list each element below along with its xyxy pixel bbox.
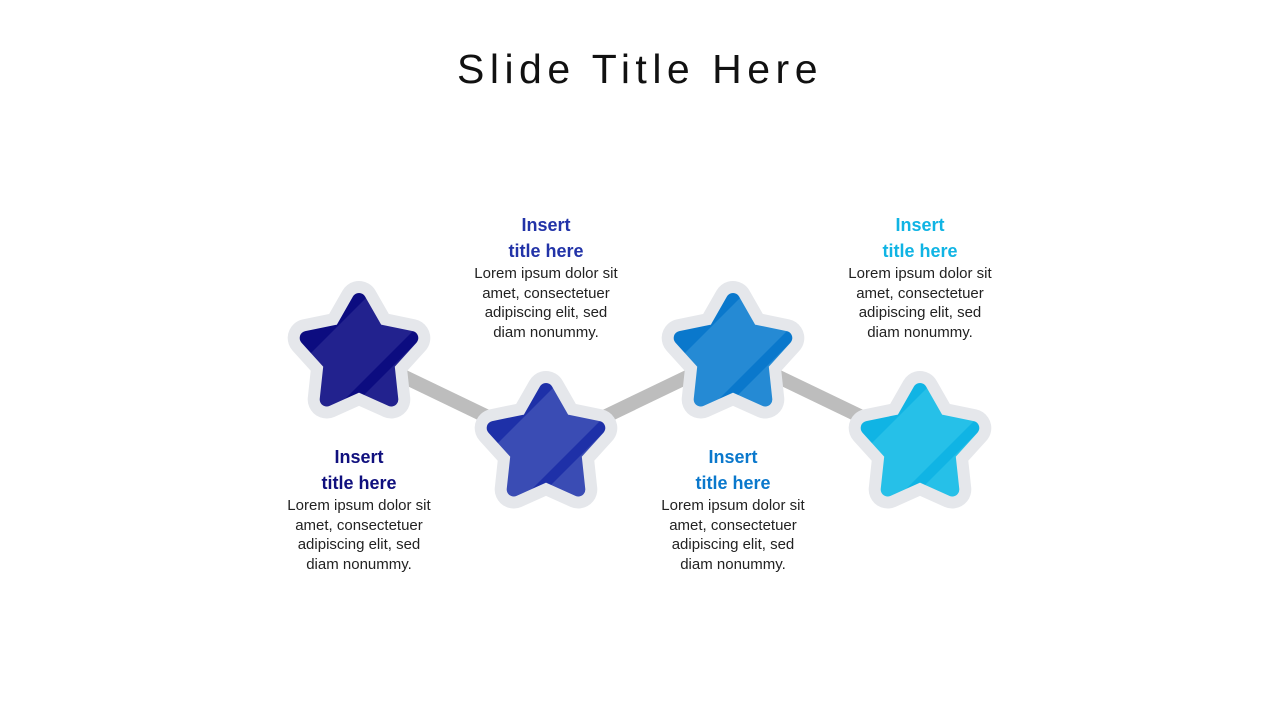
star 1 <box>288 281 430 418</box>
star 4 <box>848 371 992 508</box>
text block 4: Insert <box>895 215 945 235</box>
star 2 <box>474 371 618 508</box>
text block 2: Insert <box>521 215 571 235</box>
text block 1 <box>287 447 431 572</box>
text block 2: Lorem ipsum dolor sit amet, consectetuer adipiscing elit, sed diam nonummy. <box>474 265 618 340</box>
text block 4 <box>848 215 992 340</box>
text block 2 <box>474 215 618 340</box>
connector lines <box>359 355 920 445</box>
text block 4: title here <box>882 241 958 261</box>
text block 3: title here <box>695 473 771 493</box>
text block 4: Lorem ipsum dolor sit amet, consectetuer adipiscing elit, sed diam nonummy. <box>848 265 992 340</box>
text block 1: Insert <box>334 447 384 467</box>
text block 2: title here <box>508 241 584 261</box>
text block 3: Lorem ipsum dolor sit amet, consectetuer adipiscing elit, sed diam nonummy. <box>661 497 805 572</box>
text block 1: Lorem ipsum dolor sit amet, consectetuer adipiscing elit, sed diam nonummy. <box>287 497 431 572</box>
title: Slide Title Here <box>457 46 823 92</box>
text block 3 <box>661 447 805 572</box>
star 3 <box>662 281 804 418</box>
text block 1: title here <box>321 473 397 493</box>
text block 3: Insert <box>708 447 758 467</box>
